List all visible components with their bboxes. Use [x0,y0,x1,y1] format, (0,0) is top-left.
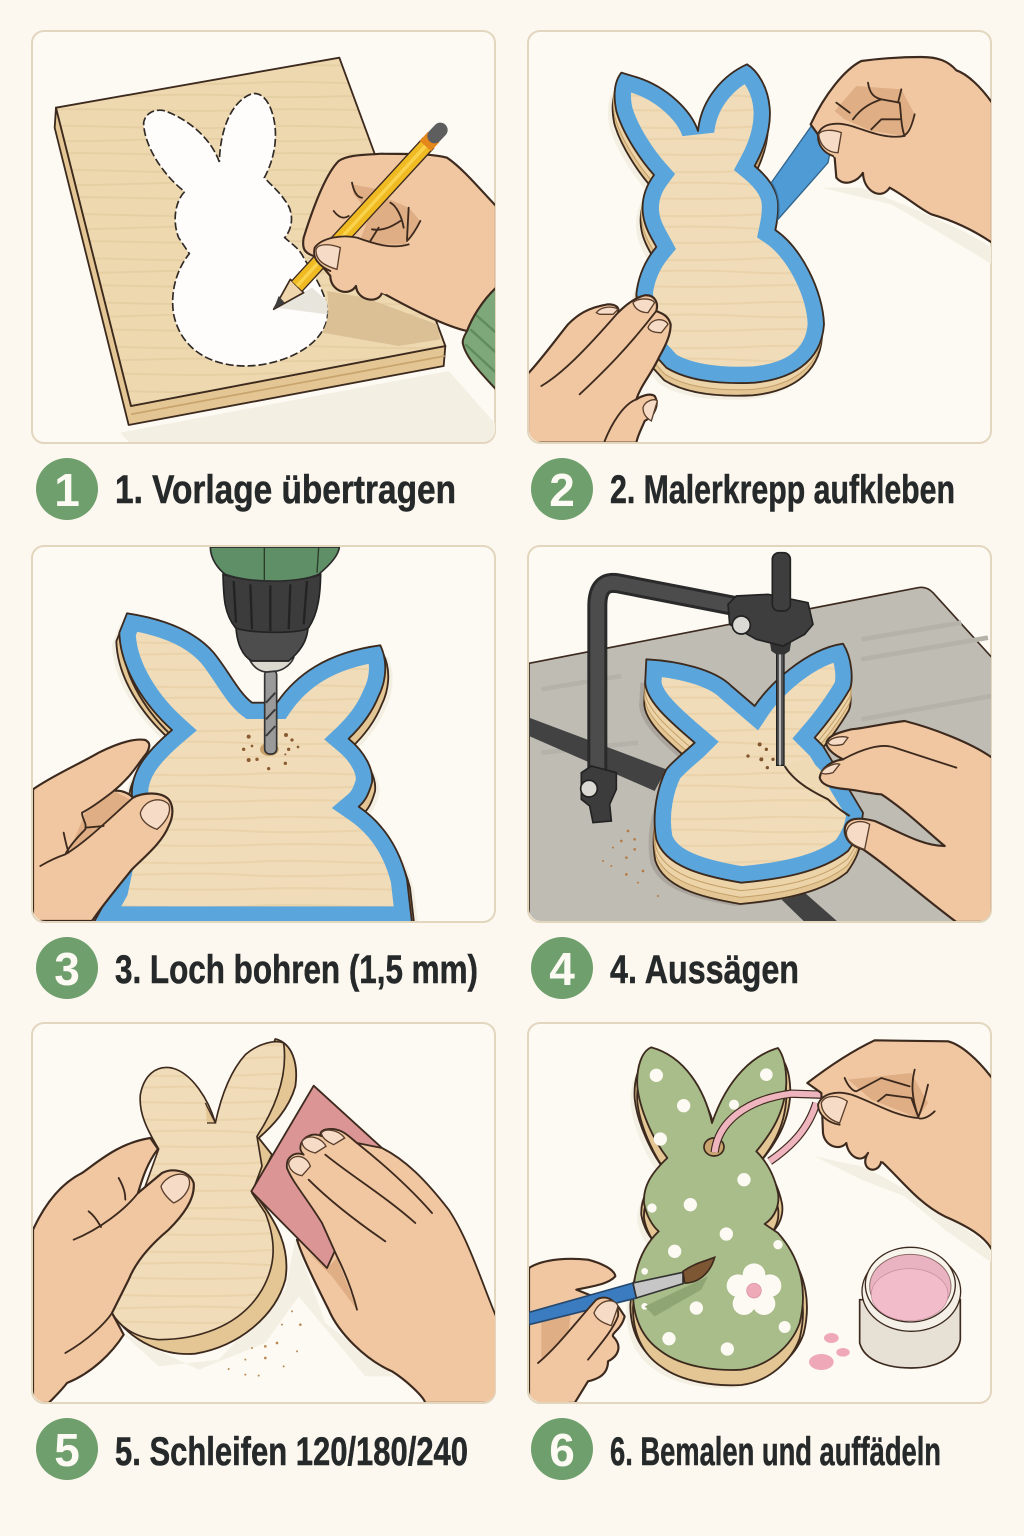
sleeve [463,288,496,389]
cut line and peeled tape [785,758,850,816]
right hand [807,1040,992,1263]
hole and ribbon [704,1094,821,1161]
shadows of hand and pencil [275,288,440,346]
drill [210,547,339,754]
step 5 badge and label: 5 [54,1424,80,1476]
wooden board [55,58,445,425]
drawing hand [303,154,496,331]
panel: step 1 transfer template [32,31,496,443]
step 1 badge and label: 1. Vorlage übertragen [115,468,456,512]
left hand with brush [529,1257,715,1403]
sawdust pile [228,1310,302,1377]
flower [727,1263,781,1315]
right hand [820,721,992,922]
step 2 badge and label [531,458,955,520]
right hand fingers [287,1129,496,1400]
step 4 badge and label: 4 [549,943,575,995]
saw frame [581,583,735,823]
step 3 badge and label [36,937,478,999]
grey table [529,587,992,922]
sanded rabbit [112,1039,296,1354]
step 5 badge and label [36,1418,468,1480]
left hand [33,1138,194,1403]
step 1 badge and label: 1 [54,464,80,516]
paint drops [809,1333,850,1370]
sawdust on table [602,830,659,897]
step 3 badge and label: 3. Loch bohren (1,5 mm) [115,948,478,992]
sawdust at cut [746,742,775,769]
saw blade and clamp [728,553,813,765]
step 6 badge and label [531,1418,941,1480]
panel: step 4 sawing [528,546,992,922]
table bars [529,718,838,922]
upper right hand [811,57,992,264]
rabbit template outline [144,93,328,366]
lower left hand [528,295,671,443]
drill hole and sawdust [242,733,299,770]
lower right hand body [297,1240,496,1403]
step 2 badge and label: 2 [549,464,575,516]
plywood rabbit with tape [639,644,863,906]
step 4 badge and label: 4. Aussägen [610,948,799,992]
panel: step 6 painting [528,1023,992,1403]
taped rabbit [608,64,824,400]
panel: step 5 sanding [32,1023,496,1403]
step 1 badge and label [36,458,456,520]
paint jar [860,1247,961,1368]
thumb [313,236,410,294]
pencil [274,130,440,309]
palm shade [310,1254,356,1308]
step 5 badge and label: 5. Schleifen 120/180/240 [115,1430,468,1474]
sandpaper [251,1086,382,1268]
taped rabbit close-up [86,613,419,934]
tape strip [770,126,830,222]
painted rabbit [626,1047,807,1388]
left hand [33,740,172,921]
step 6 badge and label: 6 [549,1424,575,1476]
panel: step 2 masking tape [528,31,992,443]
step 3 badge and label: 3 [54,943,80,995]
panel: step 3 drilling [32,546,495,934]
step 4 badge and label [531,937,799,999]
